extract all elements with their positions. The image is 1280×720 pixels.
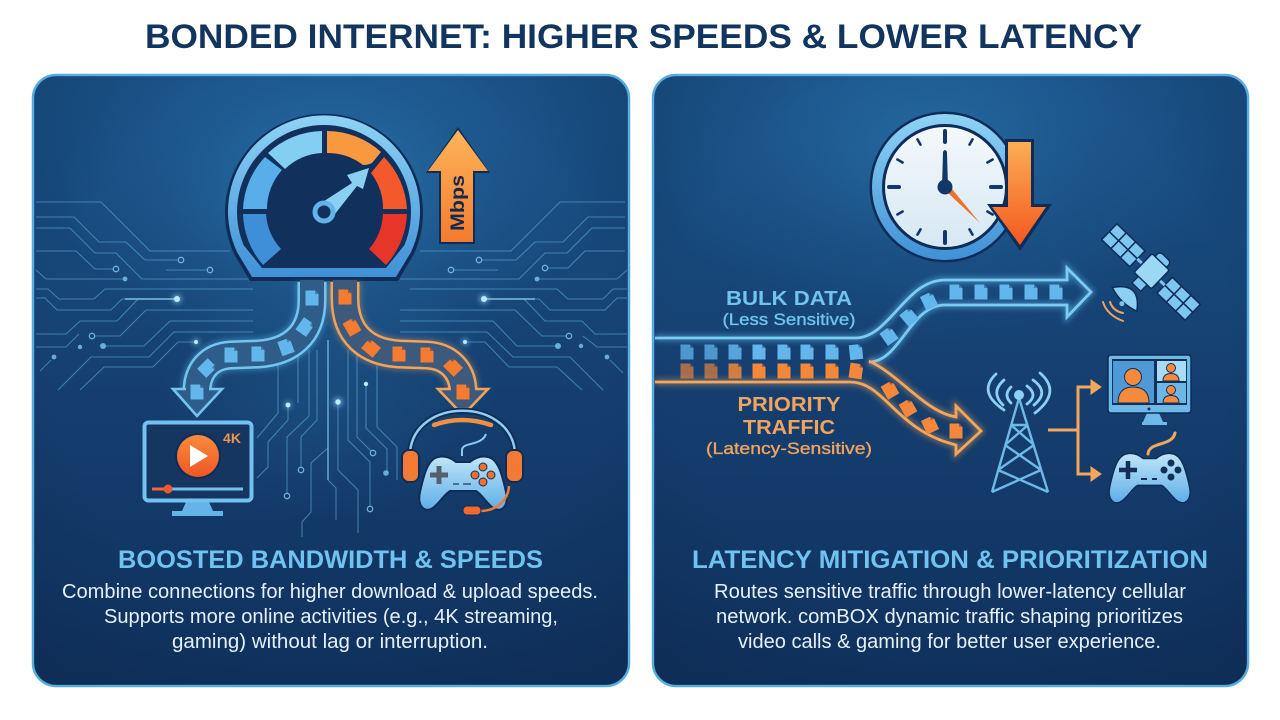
text block: bandwidth description: gaming) without lag or interruption. (172, 631, 488, 653)
arrow: bulk data path to satellite (655, 268, 1091, 362)
icon: game controller (1109, 433, 1190, 503)
icon: cell tower (988, 373, 1050, 492)
label: bulk data: BULK DATA (726, 288, 852, 310)
label: bulk data: (Less Sensitive) (722, 310, 856, 329)
icon: video call monitor (1108, 355, 1191, 425)
heading: boosted bandwidth: BOOSTED BANDWIDTH & SPEEDS (118, 546, 543, 574)
heading: latency mitigation: LATENCY MITIGATION & PRIORITIZATION (692, 546, 1208, 574)
panel: latency mitigation and prioritization (652, 74, 1250, 688)
icon: satellite (1078, 217, 1207, 345)
text block: bandwidth description: Supports more online activities (e.g., 4K streaming, (104, 606, 558, 628)
text block: latency description: video calls & gaming for better user experience. (738, 631, 1161, 653)
label: priority traffic: TRAFFIC (743, 417, 835, 439)
text block: bandwidth description (62, 581, 598, 653)
arrow: orange data path to gaming (338, 280, 488, 409)
text block: latency description (714, 581, 1186, 653)
label: priority traffic: (Latency-Sensitive) (706, 439, 872, 458)
gauge (225, 114, 423, 281)
label: priority traffic: PRIORITY (738, 394, 841, 416)
arrow: Mbps up: Mbps (448, 175, 469, 231)
label: bulk data (722, 288, 856, 329)
icon: clock (870, 112, 1020, 262)
text block: latency description: Routes sensitive traffic through lower-latency cellular (714, 581, 1186, 603)
needle (315, 168, 369, 221)
panel: boosted bandwidth and speeds (32, 74, 630, 688)
arrow: tower branches to devices (1048, 380, 1101, 481)
arrow: Mbps up (426, 127, 490, 244)
arrow: latency down (987, 139, 1052, 251)
label: priority traffic (706, 394, 872, 458)
title: BONDED INTERNET: HIGHER SPEEDS & LOWER LATENCY (145, 18, 1142, 56)
text block: bandwidth description: Combine connections for higher download & upload speeds. (62, 581, 598, 603)
icon: 4K streaming monitor: 4K (223, 430, 241, 446)
arrow: blue data path to streaming (173, 280, 318, 416)
icon: 4K streaming monitor (144, 422, 252, 516)
icon: gaming headset and controller (402, 411, 523, 515)
text block: latency description: network. comBOX dynamic traffic shaping prioritizes (716, 606, 1183, 628)
arrow: priority traffic path to tower (655, 361, 981, 454)
